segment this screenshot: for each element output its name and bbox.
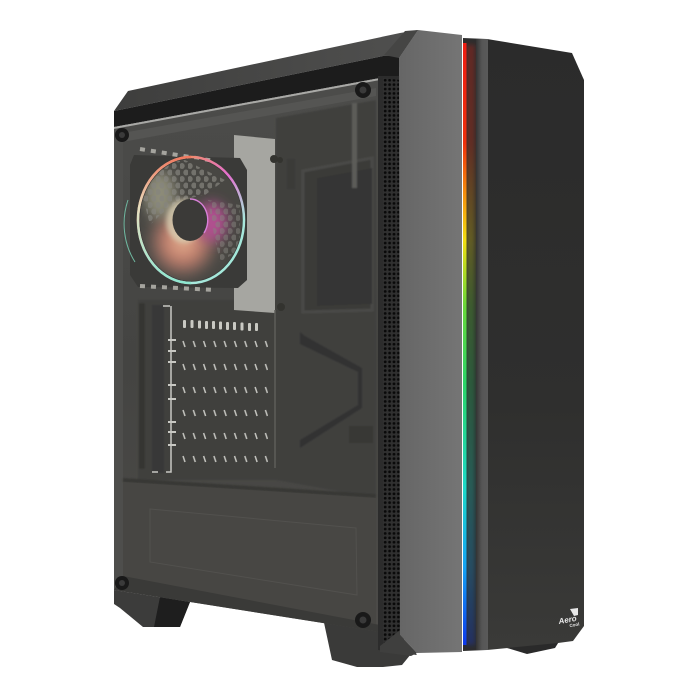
- interior: [123, 100, 376, 498]
- illustration: PC tower case: [114, 30, 584, 667]
- slot rects: [287, 159, 295, 189]
- honeycomb dots outside fan bottom: [140, 286, 215, 290]
- ridge: [476, 39, 488, 650]
- tray right line: [274, 310, 276, 468]
- logo: [557, 614, 580, 630]
- mesh strip: [383, 78, 400, 645]
- expansion vents: [180, 337, 268, 475]
- fan blade disc: [140, 159, 242, 281]
- right bay: [276, 100, 376, 498]
- ring light left: [138, 157, 191, 283]
- glass side panel: [114, 78, 383, 643]
- right foot: [323, 618, 411, 667]
- vertical bar: [352, 103, 357, 188]
- lower dark line: [123, 478, 376, 498]
- fan hub: [172, 199, 208, 241]
- upper corner bevel: [384, 30, 418, 58]
- pink hub rim: [190, 199, 208, 233]
- PSU shroud: [123, 482, 376, 627]
- left foot: [114, 590, 190, 627]
- light top edge: [114, 78, 380, 129]
- logo subtext: Cool: [569, 622, 580, 628]
- rear ring: [124, 200, 135, 262]
- lower bay brace: [300, 332, 362, 448]
- front gray panel: [399, 30, 462, 653]
- light backplate: [234, 135, 275, 313]
- fan frame: [130, 155, 247, 288]
- PCI bracket: [152, 305, 164, 473]
- honeycomb right: [208, 200, 240, 262]
- screw top left: [115, 128, 129, 142]
- blade light: [141, 160, 240, 278]
- channel glow: [466, 45, 475, 645]
- rear bracket: [139, 304, 144, 468]
- cable channel: [370, 168, 372, 304]
- honeycomb grille: [141, 160, 225, 225]
- motherboard standoffs: [270, 155, 285, 311]
- honeycomb dots outside fan top: [140, 149, 215, 161]
- screw bottom right: [355, 612, 371, 628]
- crescent: [166, 199, 202, 243]
- right front panel: [487, 39, 584, 650]
- case backing behind mesh: [378, 76, 417, 655]
- right rear foot: [497, 640, 560, 654]
- logo wing: [570, 608, 578, 616]
- glass frame top strip: [122, 88, 376, 142]
- drive cage shape: [303, 158, 372, 312]
- motherboard tray: [145, 468, 275, 480]
- top black band: [114, 56, 399, 127]
- RGB light strip: [463, 43, 466, 645]
- lower corner bevel: [380, 630, 417, 656]
- top vent row: [183, 320, 258, 331]
- fan: [124, 149, 247, 290]
- screw top right: [355, 82, 371, 98]
- RGB channel: [463, 38, 488, 651]
- PCI rail: [152, 306, 176, 472]
- left glass strip: [114, 128, 123, 590]
- logo wordmark: Aero: [557, 614, 577, 626]
- bottom glass strip: [114, 576, 380, 632]
- ring light: [138, 157, 244, 283]
- top bevel: [114, 30, 418, 111]
- shroud embossed panel: [150, 509, 357, 595]
- small bay block: [349, 426, 373, 443]
- screw bottom left: [115, 576, 129, 590]
